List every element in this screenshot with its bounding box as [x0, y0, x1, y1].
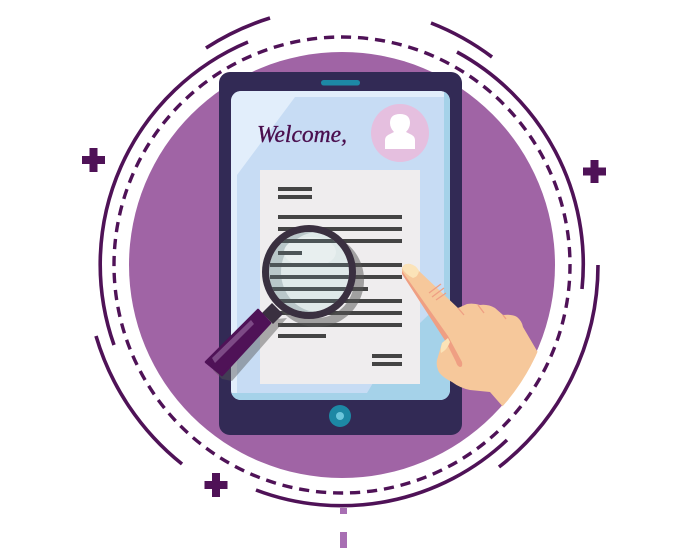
finger shading — [402, 271, 462, 367]
magnifier glass — [269, 232, 355, 312]
welcome text: Welcome, — [257, 122, 347, 148]
hand — [402, 264, 540, 408]
home button — [329, 405, 351, 427]
infographic: tablet document review — [82, 16, 606, 548]
avatar icon — [371, 104, 429, 162]
bottom dashes — [340, 508, 347, 548]
document page — [260, 170, 420, 384]
plus icon: right — [583, 160, 606, 183]
purple background circle — [129, 52, 555, 478]
tablet body — [219, 72, 462, 435]
screen — [231, 91, 450, 400]
fingernail — [402, 264, 419, 278]
magnifying glass — [206, 228, 364, 381]
dashed ring — [114, 37, 570, 493]
thumb nail — [441, 338, 450, 353]
speaker — [321, 80, 360, 86]
finger creases — [429, 284, 506, 319]
hand shape — [402, 264, 540, 408]
plus icon: left — [82, 148, 105, 172]
tablet — [219, 72, 462, 435]
magnifier handle — [206, 303, 283, 375]
plus icon: bottom — [204, 473, 228, 497]
magnifier ring — [266, 228, 352, 316]
magnifier shadow — [213, 233, 364, 381]
solid ring arcs — [96, 18, 598, 506]
